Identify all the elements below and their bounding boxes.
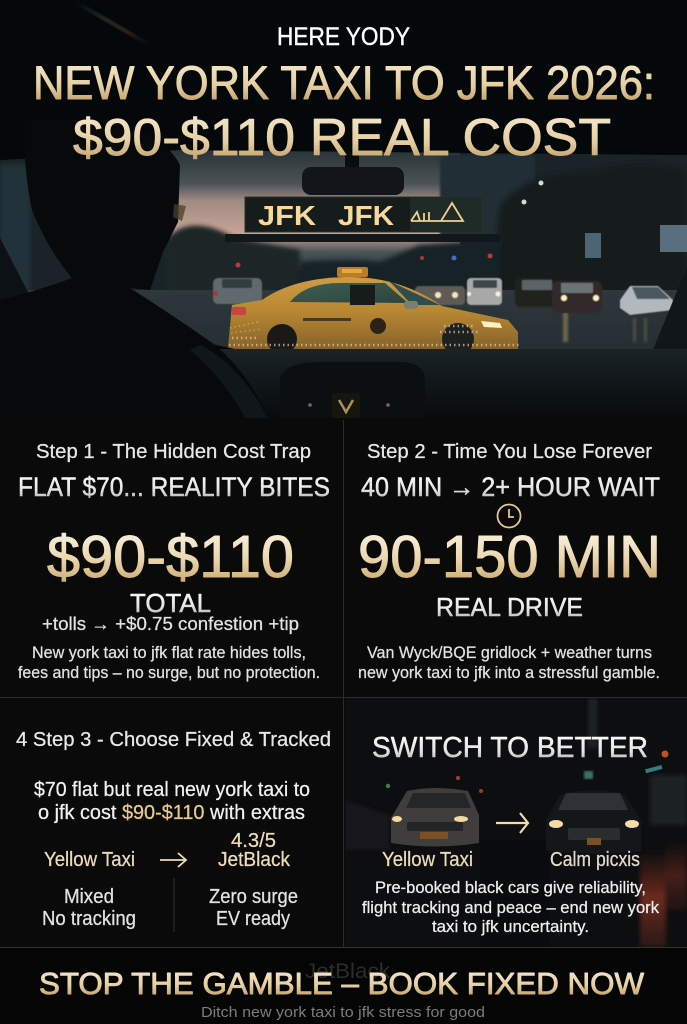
- step 3 body: o jfk cost $90-$110 with extras: [38, 802, 305, 824]
- step 2 subheading: 40 MIN → 2+ HOUR WAIT: [361, 472, 660, 502]
- yellow taxi traits: [42, 886, 136, 930]
- step 1 big price: $90-$110: [47, 524, 294, 590]
- step 1 total label: TOTAL: [130, 588, 211, 618]
- jetblack traits: Zero surge: [209, 886, 298, 908]
- switch body: Pre-booked black cars give reliability,: [375, 878, 646, 897]
- overhead JFK sign: [225, 197, 500, 242]
- step 1 add-ons: +tolls → +$0.75 confestion +tip: [42, 614, 299, 634]
- yellow taxi: [228, 267, 520, 355]
- step 1 body: fees and tips – no surge, but no protection.: [18, 663, 320, 682]
- arrow: [160, 853, 186, 867]
- right car: [546, 790, 641, 854]
- car label: yellow taxi: Yellow Taxi: [382, 849, 473, 871]
- traffic cars: [213, 278, 673, 315]
- panel: step 3 choose fixed: [16, 729, 331, 932]
- footer call to action: [0, 948, 687, 1024]
- hero photo: rainy taxi view through windshield: [0, 0, 687, 420]
- yellow taxi traits: Mixed: [64, 886, 114, 908]
- driver silhouette: [0, 150, 268, 418]
- car interior: pillars and roof: [0, 150, 687, 349]
- dashboard: [220, 349, 687, 418]
- rear-view mirror: [302, 150, 404, 195]
- arrow: [496, 813, 528, 833]
- rainbow lens flare: [82, 5, 144, 42]
- left car: [391, 788, 479, 846]
- step 3 body: [34, 779, 310, 824]
- step 1 heading: Step 1 - The Hidden Cost Trap: [36, 441, 311, 463]
- comparison: yellow taxi: Yellow Taxi: [44, 849, 135, 871]
- switch body: [362, 878, 659, 936]
- panel: switch to better: [345, 698, 687, 947]
- ghost brand: JetBlack: [305, 960, 391, 983]
- main title: NEW YORK TAXI TO JFK 2026:: [33, 56, 655, 109]
- switch body: flight tracking and peace – end new york: [362, 898, 659, 917]
- step 1 body: [18, 643, 320, 682]
- step 3 heading: 4 Step 3 - Choose Fixed & Tracked: [16, 729, 331, 751]
- step 2 body: Van Wyck/BQE gridlock + weather turns: [367, 643, 652, 662]
- overhead JFK sign: JFK: [258, 200, 316, 231]
- rating: 4.3/5: [231, 830, 276, 852]
- step 1 body: New york taxi to jfk flat rate hides tolls,: [32, 643, 306, 662]
- cta subline: Ditch new york taxi to jfk stress for good: [201, 1004, 485, 1021]
- brand name: HERE YODY: [277, 23, 410, 51]
- step 3 body: $70 flat but real new york taxi to: [34, 779, 310, 801]
- step 2 body: [358, 643, 660, 682]
- icon: clock: [498, 504, 520, 528]
- main title: [36, 66, 652, 160]
- step 2 big number: 90-150 MIN: [358, 524, 661, 590]
- panel: step 2 time lost: [358, 441, 661, 682]
- jetblack traits: EV ready: [216, 908, 290, 930]
- overhead JFK sign: JFK: [338, 200, 394, 231]
- car label: calm: Calm picxis: [550, 849, 640, 871]
- step 2 heading: Step 2 - Time You Lose Forever: [367, 441, 652, 463]
- jetblack traits: [209, 886, 298, 930]
- switch body: taxi to jfk uncertainty.: [432, 917, 589, 936]
- step 2 body: new york taxi to jfk into a stressful gamble.: [358, 663, 660, 682]
- yellow taxi traits: No tracking: [42, 908, 136, 930]
- windshield scene: [0, 150, 687, 355]
- panel: step 1 hidden cost: [18, 441, 330, 682]
- step 2 label: REAL DRIVE: [436, 592, 583, 622]
- comparison: jetblack: JetBlack: [218, 849, 291, 871]
- main title: $90-$110 REAL COST: [73, 109, 611, 167]
- step 1 subheading: FLAT $70... REALITY BITES: [18, 472, 330, 502]
- cta headline: STOP THE GAMBLE – BOOK FIXED NOW: [39, 966, 645, 1001]
- switch heading: SWITCH TO BETTER: [372, 732, 648, 764]
